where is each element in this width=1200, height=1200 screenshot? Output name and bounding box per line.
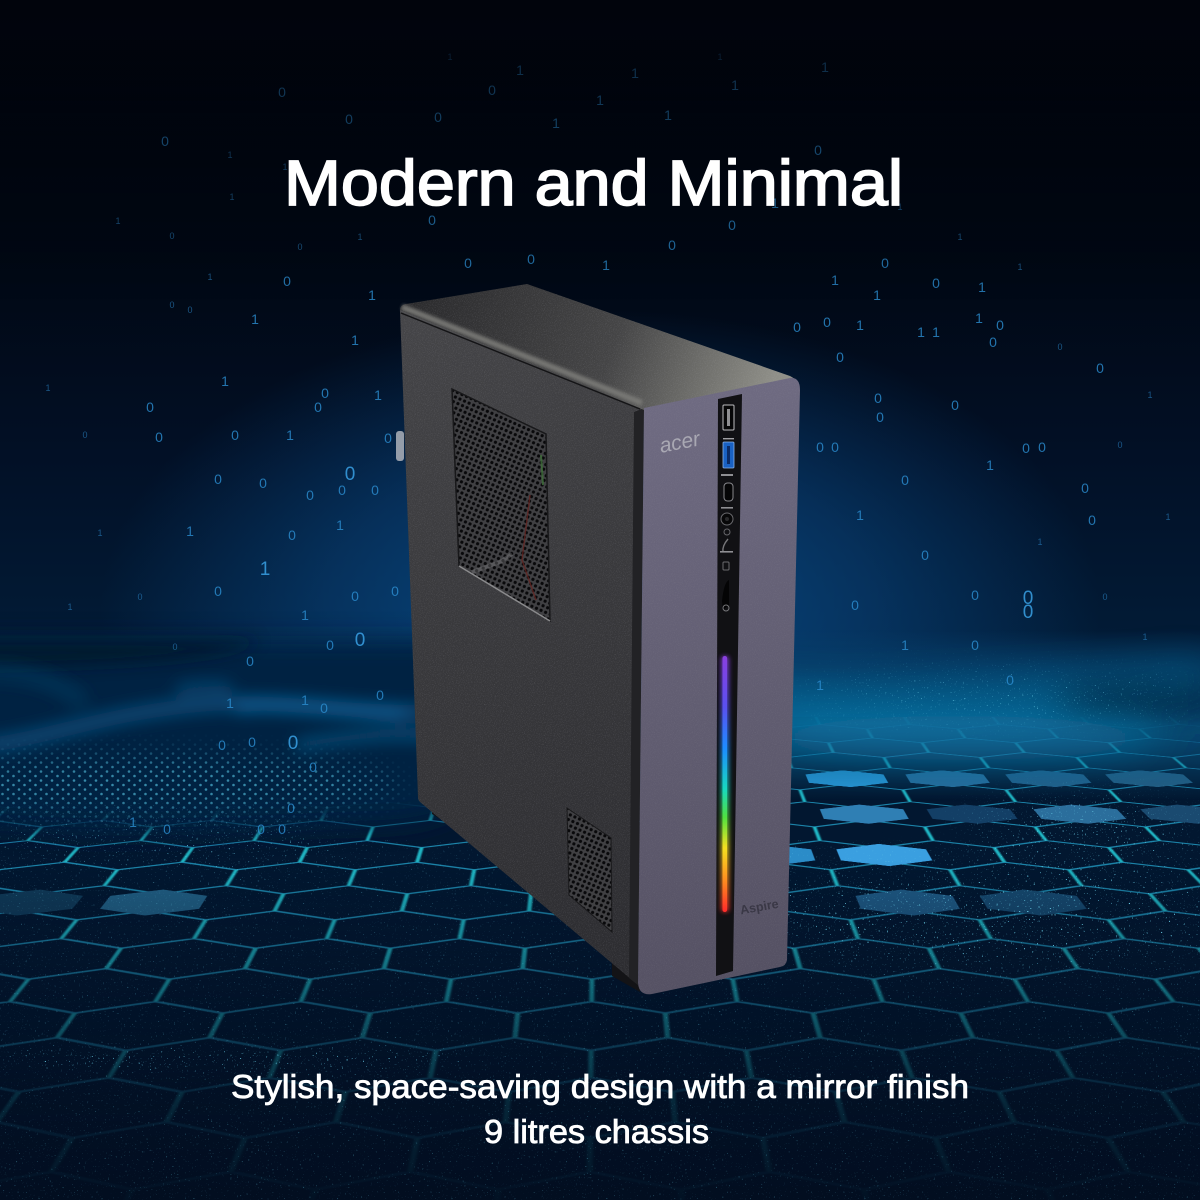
falling binary digits: 0 xyxy=(488,82,496,98)
falling binary digits: 1 xyxy=(897,202,903,212)
left dark swell hiding the hex floor xyxy=(0,640,480,832)
left side panel xyxy=(396,310,644,985)
falling binary digits: 1 xyxy=(717,52,723,62)
front panel xyxy=(638,378,800,994)
falling binary digits: 0 xyxy=(231,427,239,443)
falling binary digits: 0 xyxy=(989,334,997,350)
falling binary digits: 0 xyxy=(1088,512,1096,528)
black centre strip xyxy=(716,394,742,976)
falling binary digits: 0 xyxy=(816,439,824,455)
falling binary digits: 1 xyxy=(856,507,864,523)
falling binary digits: 0 xyxy=(314,399,322,415)
falling binary digits: 0 xyxy=(218,737,226,753)
falling binary digits: 1 xyxy=(917,324,925,340)
falling binary digits: 0 xyxy=(172,642,178,652)
falling binary digits: 0 xyxy=(434,109,442,125)
falling binary digits: 0 xyxy=(428,212,436,228)
falling binary digits: 1 xyxy=(957,232,963,242)
falling binary digits: 1 xyxy=(1165,512,1171,522)
falling binary digits: 0 xyxy=(1081,480,1089,496)
scattered speckle particles xyxy=(0,640,1200,1200)
falling binary digits: 0 xyxy=(1022,440,1030,456)
falling binary digits: 1 xyxy=(357,232,363,242)
falling binary digits: 1 xyxy=(873,287,881,303)
falling binary digits: 1 xyxy=(336,517,344,533)
falling binary digits: 1 xyxy=(67,602,73,612)
falling binary digits: 1 xyxy=(221,373,229,389)
falling binary digits: 1 xyxy=(301,607,309,623)
falling binary digits: 1 xyxy=(821,59,829,75)
falling binary digits: 0 xyxy=(831,439,839,455)
left dot field xyxy=(1,739,409,831)
falling binary digits: 1 xyxy=(282,162,288,172)
lower side grille xyxy=(567,808,612,932)
falling binary digits: 1 xyxy=(251,311,259,327)
falling binary digits: 0 xyxy=(996,317,1004,333)
falling binary digits: 1 xyxy=(447,52,453,62)
falling binary digits: 0 xyxy=(971,637,979,653)
falling binary digits: 1 xyxy=(516,62,524,78)
falling binary digits: 1 xyxy=(602,257,610,273)
feet xyxy=(432,804,640,992)
falling binary digits: 1 xyxy=(901,637,909,653)
falling binary digits: 1 xyxy=(186,523,194,539)
falling binary digits: 0 xyxy=(155,429,163,445)
falling binary digits: 1 xyxy=(596,92,604,108)
falling binary digits: 1 xyxy=(975,310,983,326)
falling binary digits: 0 xyxy=(288,733,298,754)
falling binary digits: 1 xyxy=(227,150,233,160)
falling binary digits: 1 xyxy=(97,528,103,538)
falling binary digits: 1 xyxy=(129,814,137,830)
Aspire label: Aspire xyxy=(739,897,780,917)
falling binary digits: 0 xyxy=(823,314,831,330)
falling binary digits: 0 xyxy=(320,700,328,716)
falling binary digits: 0 xyxy=(814,142,822,158)
falling binary digits: 0 xyxy=(901,472,909,488)
falling binary digits: 1 xyxy=(1142,632,1148,642)
falling binary digits: 0 xyxy=(309,759,317,775)
falling binary digits: 1 xyxy=(229,192,235,202)
falling binary digits: 0 xyxy=(371,482,379,498)
falling binary digits: 0 xyxy=(82,430,88,440)
falling binary digits: 0 xyxy=(288,527,296,543)
falling binary digits: 0 xyxy=(1006,672,1014,688)
falling binary digits: 1 xyxy=(301,692,309,708)
rainbow LED light bar xyxy=(721,656,729,912)
falling binary digits: 0 xyxy=(384,430,392,446)
falling binary digits: 1 xyxy=(631,65,639,81)
falling binary digits: 0 xyxy=(345,111,353,127)
falling binary digits: 0 xyxy=(876,409,884,425)
subtitle line 2: 9 litres chassis xyxy=(484,1113,709,1150)
falling binary digits: 0 xyxy=(1117,440,1123,450)
falling binary digits: 1 xyxy=(552,115,560,131)
falling binary digits: 0 xyxy=(248,734,256,750)
falling binary digits: 0 xyxy=(391,583,399,599)
falling binary digits: 0 xyxy=(163,821,171,837)
falling binary digits: 0 xyxy=(169,300,175,310)
falling binary digits: 0 xyxy=(259,475,267,491)
falling binary digits: 0 xyxy=(345,464,355,485)
falling binary digits: 0 xyxy=(326,637,334,653)
falling binary digits: 1 xyxy=(260,559,270,580)
falling binary digits: 0 xyxy=(971,587,979,603)
falling binary digits: 0 xyxy=(1096,360,1104,376)
title: Modern and Minimal xyxy=(284,147,903,219)
falling binary digits: 0 xyxy=(376,687,384,703)
falling binary digits: 0 xyxy=(214,471,222,487)
falling binary digits: 0 xyxy=(836,349,844,365)
falling binary digits: 1 xyxy=(856,317,864,333)
falling binary digits: 1 xyxy=(368,287,376,303)
falling binary digits: 1 xyxy=(1037,537,1043,547)
falling binary digits: 0 xyxy=(1057,342,1063,352)
falling binary digits: 1 xyxy=(932,324,940,340)
falling binary digits: 0 xyxy=(1023,602,1033,623)
hexagon floor in perspective xyxy=(0,723,1200,1172)
falling binary digits: 1 xyxy=(831,272,839,288)
falling binary digits: 0 xyxy=(874,390,882,406)
falling binary digits: 1 xyxy=(45,383,51,393)
soft wave clouds xyxy=(500,662,1200,760)
falling binary digits: 1 xyxy=(816,677,824,693)
falling binary digits: 0 xyxy=(214,583,222,599)
falling binary digits: 0 xyxy=(1102,592,1108,602)
falling binary digits: 0 xyxy=(1023,588,1033,609)
falling binary digits: 0 xyxy=(297,242,303,252)
falling binary digits: 1 xyxy=(664,107,672,123)
falling binary digits: 0 xyxy=(932,275,940,291)
falling binary digits: 0 xyxy=(351,588,359,604)
subtitle line 1: Stylish, space-saving design with a mirror finish xyxy=(231,1068,969,1105)
falling binary digits: 0 xyxy=(246,653,254,669)
falling binary digits: 1 xyxy=(115,216,121,226)
falling binary digits: 1 xyxy=(986,457,994,473)
falling binary digits: 0 xyxy=(668,237,676,253)
falling binary digits: 1 xyxy=(978,279,986,295)
falling binary digits: 0 xyxy=(137,592,143,602)
falling binary digits: 1 xyxy=(207,272,213,282)
falling binary digits: 0 xyxy=(278,821,286,837)
falling binary digits: 0 xyxy=(527,251,535,267)
acer logo: acer xyxy=(658,427,703,458)
falling binary digits: 0 xyxy=(728,217,736,233)
falling binary digits: 1 xyxy=(771,195,779,211)
falling binary digits: 0 xyxy=(306,487,314,503)
falling binary digits: 0 xyxy=(187,305,193,315)
falling binary digits: 0 xyxy=(287,800,295,816)
falling binary digits: 1 xyxy=(1017,262,1023,272)
falling binary digits: 1 xyxy=(351,332,359,348)
falling binary digits: 1 xyxy=(1147,390,1153,400)
falling binary digits: 0 xyxy=(283,273,291,289)
falling binary digits: 0 xyxy=(951,397,959,413)
falling binary digits: 0 xyxy=(921,547,929,563)
falling binary digits: 0 xyxy=(1038,439,1046,455)
falling binary digits: 1 xyxy=(226,695,234,711)
USB ports and controls xyxy=(720,405,734,611)
falling binary digits: 0 xyxy=(169,231,175,241)
falling binary digits: 0 xyxy=(338,482,346,498)
falling binary digits: 0 xyxy=(278,84,286,100)
falling binary digits: 0 xyxy=(321,385,329,401)
falling binary digits: 0 xyxy=(161,133,169,149)
wave fog and particle dots over the floor xyxy=(0,629,1200,1200)
falling binary digits: 0 xyxy=(464,255,472,271)
falling binary digits: 1 xyxy=(374,387,382,403)
falling binary digits: 0 xyxy=(881,255,889,271)
falling binary digits: 0 xyxy=(146,399,154,415)
top panel xyxy=(400,284,798,410)
wave streaks on the left xyxy=(0,672,430,745)
falling binary digits: 1 xyxy=(731,77,739,93)
falling binary digits: 0 xyxy=(851,597,859,613)
side ventilation grille with fan xyxy=(452,389,550,621)
falling binary digits: 0 xyxy=(355,630,365,651)
falling binary digits: 0 xyxy=(257,821,265,837)
falling binary digits: 0 xyxy=(793,319,801,335)
falling binary digits: 1 xyxy=(286,427,294,443)
